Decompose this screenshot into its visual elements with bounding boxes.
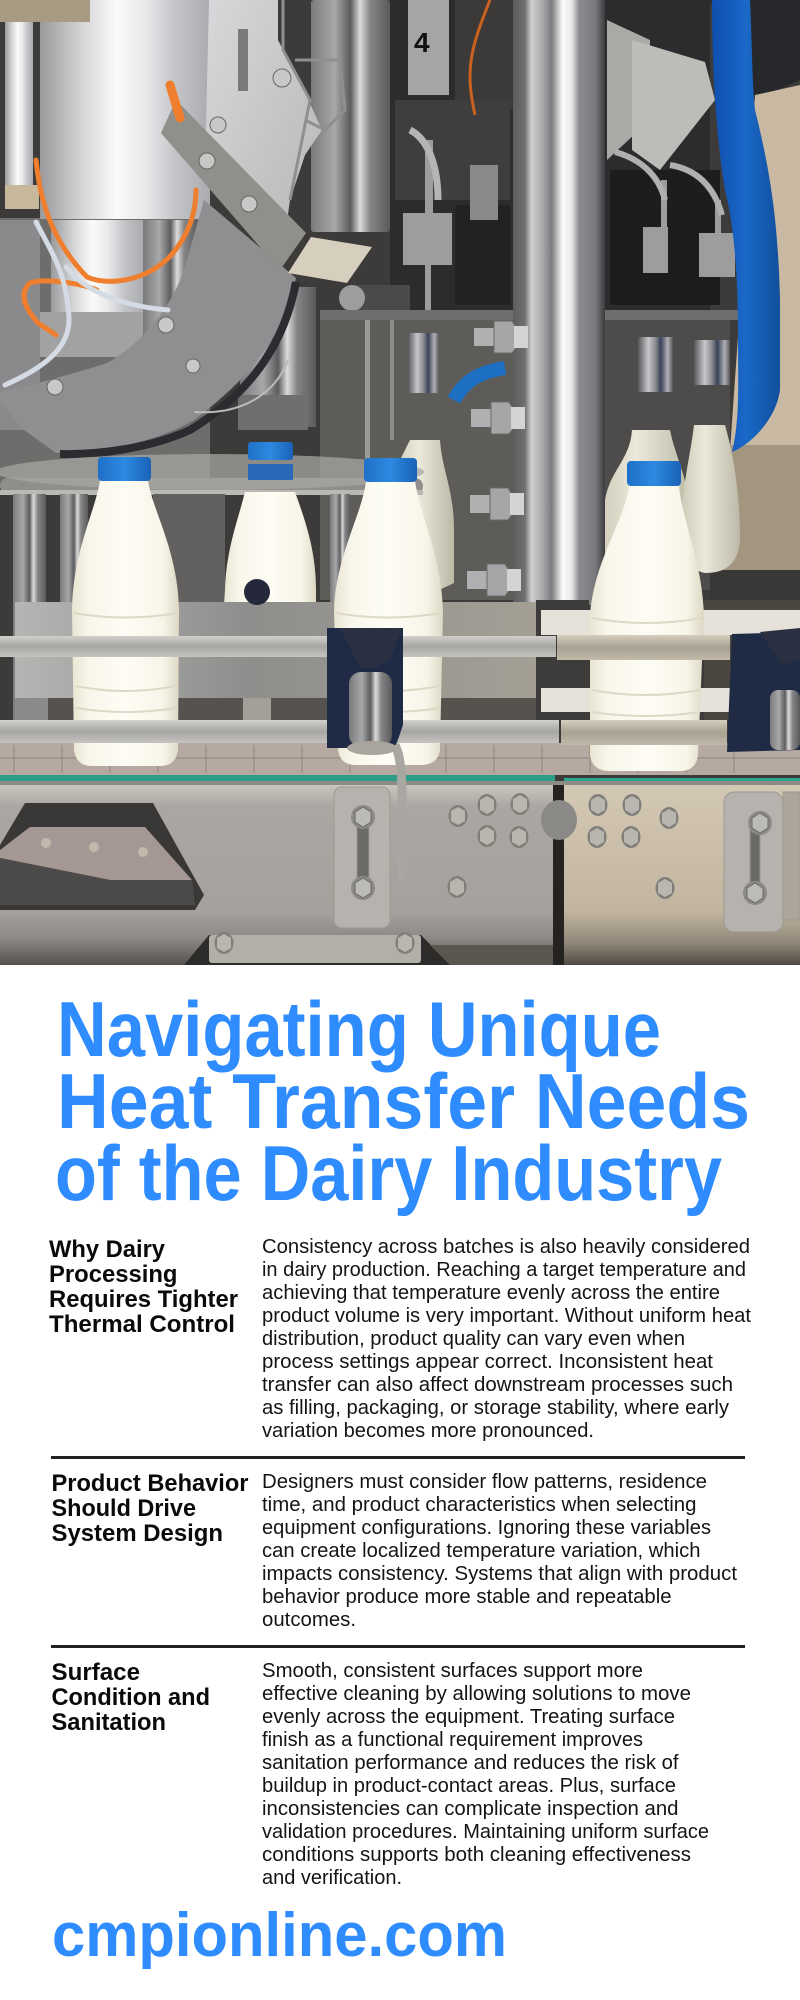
filler valves [339,130,735,315]
footer website: cmpionline.com [52,1901,507,1970]
plate window [238,29,248,91]
body text: consistency: as filling, packaging, or storage stability, where early [262,1397,729,1419]
second steel cylinder [311,0,390,232]
orange wires [470,0,490,115]
heading: product behavior [52,1470,249,1547]
diagonal arm bracket [161,100,306,270]
back bottles [395,425,740,600]
back centre bottle [224,442,316,605]
section 3: surface condition [52,1659,709,1889]
hero photo: dairy bottling line [0,0,800,965]
spindle assembly [0,0,316,430]
title [55,985,750,1217]
body text: designers: behavior produce more stable and repeatable [262,1586,672,1608]
arc dark edges [60,282,296,454]
heading: why dairy processing: Thermal Control [49,1311,235,1338]
tan end block [288,237,372,283]
body text: consistency: process settings appear correct. Inconsistent heat [262,1351,713,1373]
dark knob [244,579,270,605]
heading: product behavior: Product Behavior [52,1470,249,1497]
body text: consistency: in dairy production. Reaching a target temperature and [262,1259,746,1281]
number tag 4 box: 4 [414,27,430,58]
stainless spouts [365,320,730,475]
base window with chain [0,803,204,910]
body text: smooth surfaces: evenly across the equipment. Treating surface [262,1706,675,1728]
body text: designers: impacts consistency. Systems that align with product [262,1563,737,1585]
body text: smooth surfaces: inconsistencies can complicate inspection and [262,1798,678,1820]
body text: consistency: transfer can also affect downstream processes such [262,1374,733,1396]
body text: designers: outcomes. [262,1609,356,1631]
heading: surface condition and sanitation: Sanitation [52,1709,166,1736]
body text: smooth surfaces: effective cleaning by allowing solutions to move [262,1683,691,1705]
machinery background [0,0,800,965]
orange and white tubing [5,85,288,412]
body text: consistency: Consistency across batches is also heavily considered [262,1236,750,1258]
mounting plate [205,0,322,270]
green conveyor strip [0,775,800,785]
wire guards [283,0,345,200]
body text: consistency: distribution, product quality can vary even when [262,1328,685,1350]
section 2: product behavior [52,1470,737,1631]
big blue hose [712,0,780,452]
heading: why dairy processing: Requires Tighter [49,1286,238,1313]
heading: product behavior: System Design [52,1520,223,1547]
conveyor belt [0,743,800,775]
front bottle 3 [590,461,704,771]
body text: consistency: product volume is very important. Without uniform heat [262,1305,751,1327]
upper guide rails [0,635,730,660]
body text: designers: can create localized temperature variation, which [262,1540,700,1562]
heading: why dairy processing [49,1236,238,1338]
heading: why dairy processing: Processing [49,1261,178,1288]
right clamp [727,628,800,752]
number tag 4 box [408,0,449,95]
slotted plates [334,787,800,932]
title: Heat Transfer Needs [57,1057,750,1145]
front bottle 1 [72,457,179,766]
bracket bottom [209,932,421,963]
shelf [320,310,740,320]
lower base steel [0,785,800,965]
blue hose inner [454,368,505,400]
pipe fittings [467,321,528,596]
body text: smooth surfaces [262,1660,709,1889]
support columns [13,494,350,724]
section 1: thermal control [49,1236,751,1442]
curved steel guide arc [0,200,296,453]
plate bolts [351,805,772,905]
left steel cylinder [40,0,210,219]
sheet steel guard [15,600,800,720]
title: Navigating Unique [57,985,661,1073]
body text: consistency: variation becomes more pronounced. [262,1420,594,1442]
front bottle 2 [334,458,443,765]
heading: surface condition and sanitation: Condition and [52,1684,210,1711]
heading: product behavior: Should Drive [52,1495,196,1522]
centre knob [541,800,577,840]
body text: smooth surfaces: Smooth, consistent surfaces support more [262,1660,643,1682]
body text: smooth surfaces: sanitation performance and reduces the risk of [262,1752,679,1774]
body text: smooth surfaces: buildup in product-contact areas. Plus, surface [262,1775,676,1797]
body text: designers: time, and product characteristics when selecting [262,1494,696,1516]
conveyor segment lines [0,745,800,773]
lower guide rails [0,720,727,745]
body text: designers: equipment configurations. Ignoring these variables [262,1517,711,1539]
heading: surface condition and sanitation: Surface [52,1659,140,1686]
title: of the Dairy Industry [55,1129,722,1217]
white guide slats [541,610,800,712]
body text: smooth surfaces: validation procedures. Maintaining uniform surface [262,1821,709,1843]
heading: why dairy processing: Why Dairy [49,1236,165,1263]
right grey control boxes [607,20,715,170]
body text: designers [262,1471,737,1631]
body text: smooth surfaces: finish as a functional requirement improves [262,1729,643,1751]
body text: smooth surfaces: conditions supports both cleaning effectiveness [262,1844,691,1866]
white content background [0,965,800,2000]
arm and arc bolts [47,69,291,395]
centre clamp [327,628,403,880]
rotary disc [0,454,424,495]
body text: designers: Designers must consider flow patterns, residence [262,1471,707,1493]
body text: consistency [262,1236,751,1442]
base bolts [448,793,678,899]
heading: surface condition and sanitation [52,1659,210,1736]
body text: consistency: achieving that temperature evenly across the entire [262,1282,720,1304]
big vertical steel pipe [513,0,605,605]
body text: smooth surfaces: and verification. [262,1867,402,1889]
